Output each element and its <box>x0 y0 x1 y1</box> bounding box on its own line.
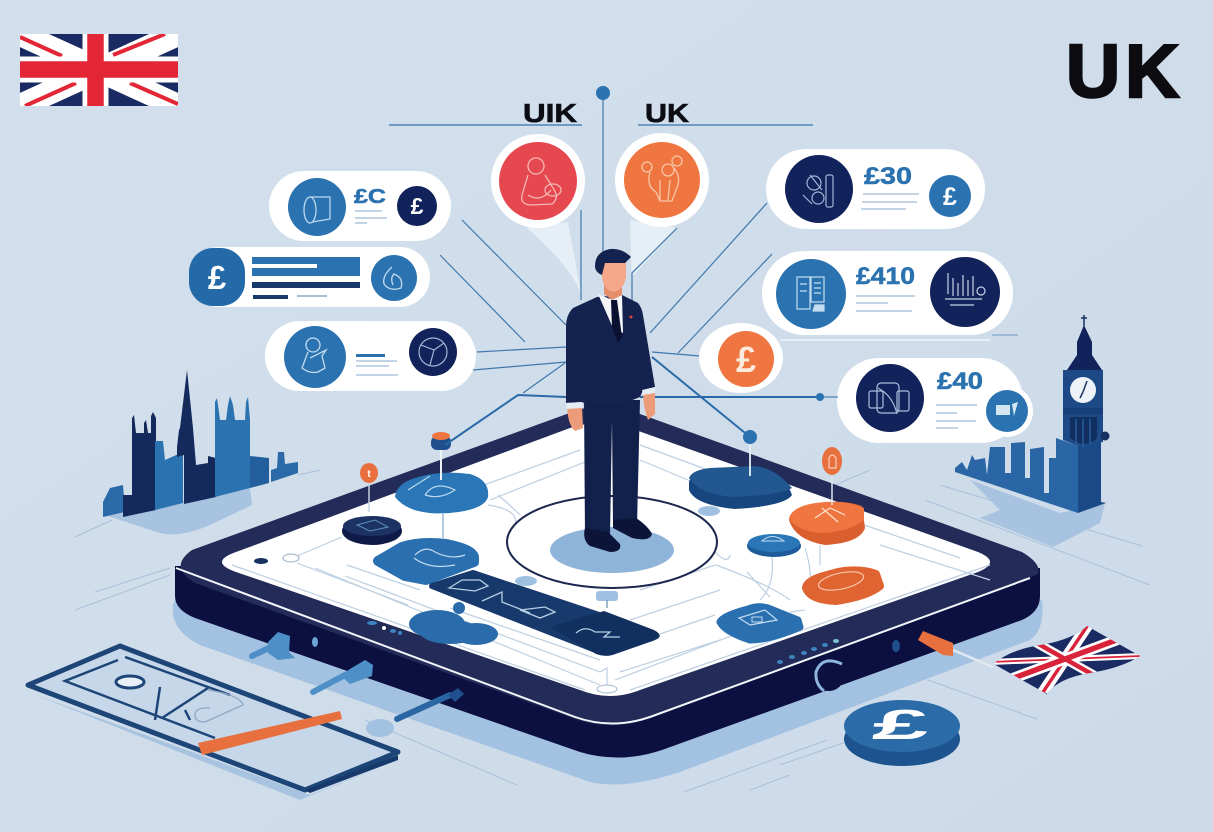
pencil <box>198 711 342 755</box>
light beams below the round badges <box>527 220 677 298</box>
orange cable and plug <box>918 631 993 667</box>
panel: pill £410 <box>762 251 1013 335</box>
title: UK top right: UK <box>1066 29 1184 113</box>
panel: pill £30: £30 <box>864 163 912 190</box>
panel: pill £40 <box>837 358 1033 443</box>
node: orange lower <box>806 568 880 601</box>
tie <box>611 300 622 343</box>
shoes <box>584 528 620 552</box>
panel: pill with £C: £ <box>411 193 424 219</box>
node: orange with pin <box>789 447 865 545</box>
badge: red person <box>491 134 585 228</box>
central ring <box>507 496 717 588</box>
panel: pill £30 <box>766 149 985 229</box>
circuit lines <box>232 445 990 690</box>
knob <box>814 661 844 691</box>
node: dark puck with pin: t <box>367 469 371 480</box>
cuffs <box>566 387 655 409</box>
pin: orange cap <box>431 432 451 480</box>
panel: pill with bars <box>189 247 430 307</box>
right hand <box>643 392 655 420</box>
heading: UK label: UK <box>645 98 689 128</box>
figure: businessman <box>566 249 655 552</box>
node: blue lower <box>720 607 800 640</box>
flag: top left Union Jack <box>20 34 178 106</box>
panel: pill £30: £ <box>943 183 957 211</box>
jacket <box>566 295 655 403</box>
neck <box>604 284 622 300</box>
left hand <box>567 407 583 431</box>
plugs <box>252 632 464 737</box>
node: blue cloud <box>409 602 498 645</box>
panel: orange pound badge <box>699 323 783 393</box>
node: dark puck with pin <box>342 463 402 545</box>
node: large blue <box>378 514 474 580</box>
lapel pin <box>630 316 632 318</box>
panel: pill with £C <box>269 171 451 241</box>
node: blue top-left <box>395 473 488 513</box>
connectors: thick blue lines <box>445 357 838 445</box>
illustration: left city skyline <box>103 370 298 534</box>
node: dark blue top-right <box>689 443 792 509</box>
node: dark strip <box>432 573 660 656</box>
trousers <box>584 400 640 536</box>
background perspective lines <box>75 470 1150 792</box>
port dot <box>892 640 900 652</box>
pound coin: £ <box>870 701 934 748</box>
panel: pill with £C: £C <box>354 186 386 208</box>
panel: pill with bars: £ <box>208 259 227 296</box>
platform rim <box>181 406 1039 725</box>
illustration: Big Ben and right skyline <box>955 315 1110 547</box>
flag: bottom right waving <box>994 626 1140 694</box>
small nodes <box>515 506 720 601</box>
left screen markers <box>254 554 299 564</box>
status lights <box>367 621 402 635</box>
clipboard <box>28 646 398 800</box>
connector lines from callouts to the figure <box>440 93 1018 393</box>
tablet platform <box>175 406 1040 758</box>
platform screen <box>222 423 990 696</box>
top node dot <box>596 86 610 100</box>
panel: pill £410: £410 <box>856 263 915 290</box>
heading: UIK label: UIK <box>523 98 577 128</box>
feet base <box>550 527 674 573</box>
badge: orange figure <box>615 133 709 227</box>
hair <box>595 249 631 275</box>
panel: orange pound badge: £ <box>736 339 756 380</box>
node dots <box>743 393 824 444</box>
face <box>602 262 626 292</box>
panel: pill with person and globe <box>265 321 476 391</box>
platform shadow <box>173 590 1042 784</box>
panel: pill £40: £40 <box>937 368 983 395</box>
node: small blue <box>747 534 801 557</box>
pound coin <box>844 700 960 766</box>
platform side <box>175 566 1040 758</box>
shirt <box>598 294 623 333</box>
